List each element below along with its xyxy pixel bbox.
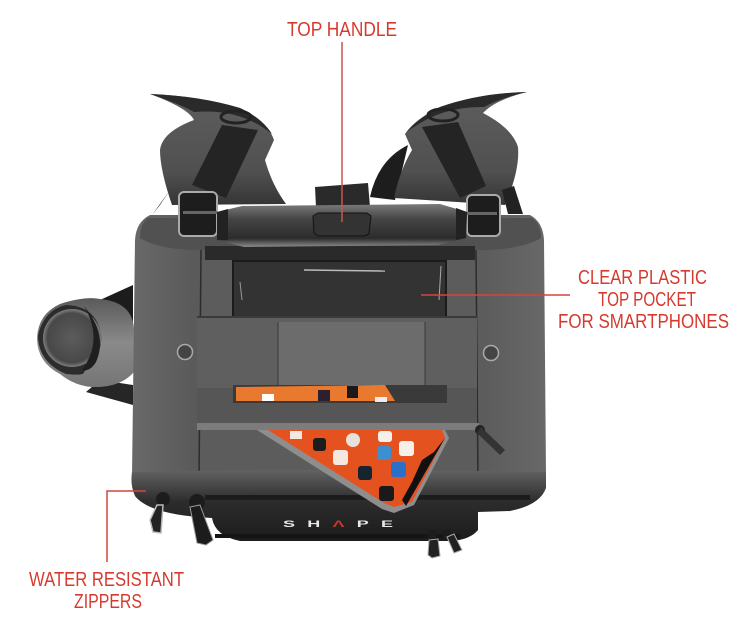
pocket zipper — [197, 423, 505, 455]
icon: backpack — [37, 92, 546, 558]
label: clear plastic pocket — [558, 267, 729, 333]
top handle — [217, 204, 467, 247]
clear plastic top pocket — [233, 261, 446, 325]
phone — [257, 430, 449, 513]
label: clear plastic pocket: CLEAR PLASTIC — [578, 267, 707, 289]
strap: right shoulder — [370, 92, 527, 214]
back tab — [315, 183, 370, 207]
snap button right — [484, 346, 498, 360]
callout: clear plastic top pocket — [421, 267, 729, 333]
label: top handle: TOP HANDLE — [287, 19, 397, 41]
label: clear plastic pocket: TOP POCKET — [598, 289, 696, 311]
app icons — [290, 431, 414, 501]
label: water resistant zippers — [29, 569, 184, 613]
zipper pulls: left — [150, 492, 213, 545]
label: water resistant zippers: ZIPPERS — [74, 591, 142, 613]
callout: water resistant zippers — [29, 491, 184, 613]
strap: left shoulder — [150, 94, 286, 215]
main body — [132, 215, 546, 480]
right buckle — [467, 195, 500, 236]
leader line: clear plastic pocket — [421, 294, 570, 296]
left buckle — [179, 192, 217, 236]
snap button left — [178, 344, 192, 360]
phone slit — [233, 385, 447, 403]
leader line: top handle — [341, 42, 343, 222]
strap band — [197, 316, 477, 426]
label: water resistant zippers: WATER RESISTANT — [29, 569, 184, 591]
zipper pulls: right — [427, 529, 462, 558]
lower section — [131, 470, 546, 541]
water bottle — [37, 285, 134, 405]
logo: SH Λ PE — [283, 519, 393, 530]
leader line: zippers — [107, 491, 146, 562]
